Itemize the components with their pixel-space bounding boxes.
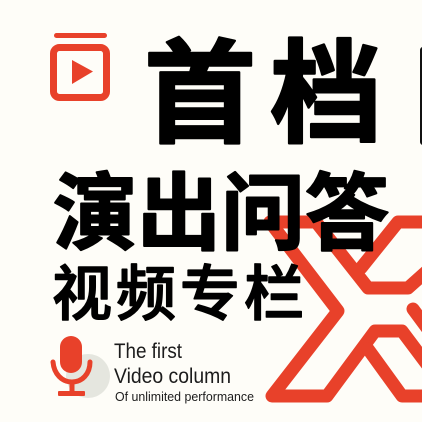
- subtitle: 视频专栏: [52, 261, 304, 328]
- icon: microphone: [53, 336, 110, 398]
- title: first line: [144, 32, 382, 157]
- icon: video play: [54, 33, 107, 98]
- icon: large red X outline: [270, 222, 422, 396]
- text: english tagline: Video column: [114, 365, 231, 388]
- text: english tagline: [114, 340, 254, 404]
- title: first line: 档: [270, 32, 382, 157]
- title: first line: 首: [144, 32, 256, 157]
- text: english tagline: The first: [114, 340, 182, 363]
- edge of cropped character: [420, 47, 422, 145]
- title: second line: 演出问答: [53, 167, 389, 261]
- text: english tagline: Of unlimited performance: [115, 389, 254, 404]
